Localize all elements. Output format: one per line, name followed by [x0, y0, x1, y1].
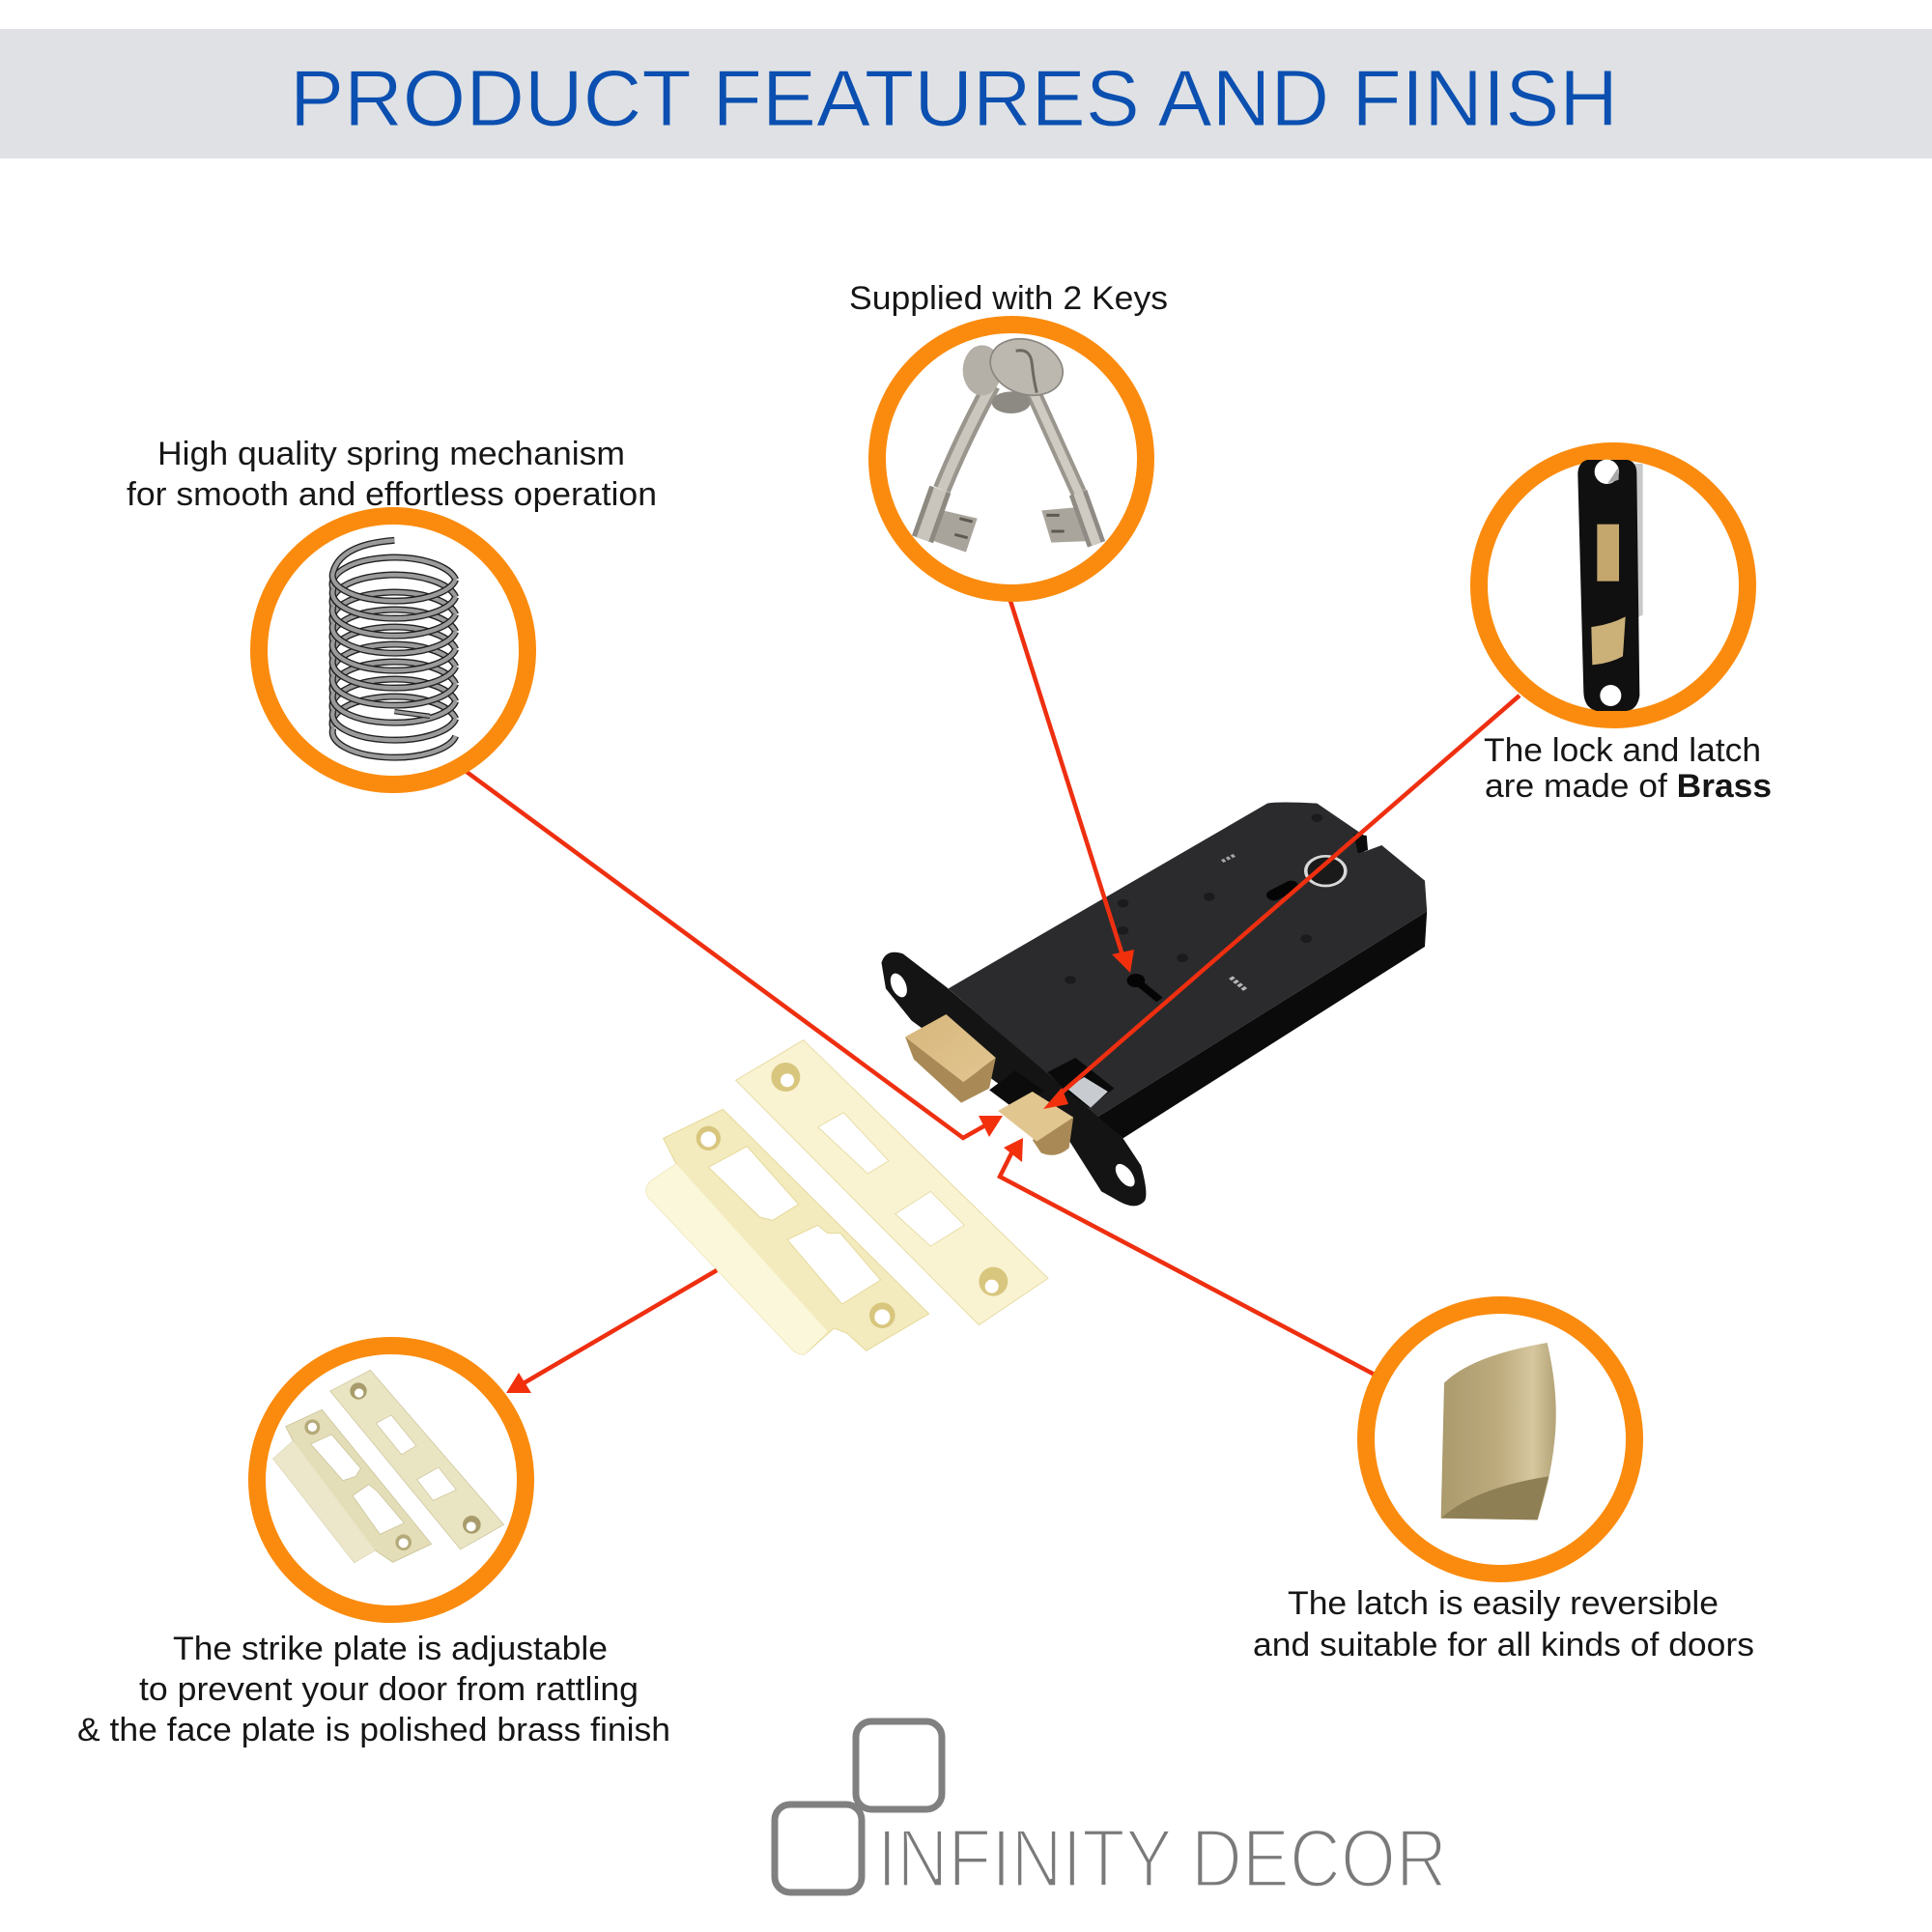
callout ring: keys — [877, 325, 1146, 593]
strike plate and face plate — [646, 1040, 1048, 1354]
label: spring — [127, 436, 657, 513]
icon: coil spring — [332, 540, 456, 757]
label: strike plate: & the face plate is polished brass finish — [77, 1712, 670, 1748]
label: strike plate: The strike plate is adjustable — [173, 1631, 608, 1667]
callout ring: brass lock face — [1479, 451, 1747, 720]
arrow: keys to keyhole — [1010, 601, 1123, 958]
label: brass: The lock and latch — [1484, 732, 1761, 769]
callout ring: reversible latch — [1366, 1305, 1634, 1574]
arrow: spring to latch bolt — [467, 772, 1003, 1138]
label: brass: are made of Brass — [1485, 768, 1772, 805]
label: keys: Supplied with 2 Keys — [849, 280, 1168, 317]
label: brass — [1484, 732, 1772, 805]
arrow: strike plate to inset — [506, 1270, 717, 1393]
logo: Infinity Decor: INFINITY DECOR — [877, 1813, 1447, 1905]
label: strike plate — [77, 1631, 670, 1748]
logo: Infinity Decor — [775, 1721, 1447, 1905]
lock body illustration — [881, 802, 1427, 1206]
label: spring: for smooth and effortless operation — [127, 476, 657, 513]
label: spring: High quality spring mechanism — [157, 436, 625, 472]
arrow: brass lock to latch bolt — [1061, 696, 1520, 1094]
icon: two keys — [923, 330, 1096, 553]
icon: lock face plate — [1577, 460, 1643, 711]
title banner: PRODUCT FEATURES AND FINISH — [290, 53, 1618, 143]
callout ring: spring — [259, 516, 527, 784]
label: latch: The latch is easily reversible — [1288, 1585, 1719, 1622]
callout ring: strike plates — [257, 1346, 526, 1614]
title banner — [0, 29, 1932, 158]
icon: strike and face plates — [273, 1370, 504, 1563]
label: latch: and suitable for all kinds of doors — [1253, 1627, 1754, 1663]
label: latch — [1253, 1585, 1754, 1663]
icon: brass latch — [1441, 1343, 1556, 1520]
label: strike plate: to prevent your door from rattling — [139, 1671, 639, 1708]
arrow heads over lock — [1043, 950, 1134, 1109]
arrow: latch inset to latch bolt — [1000, 1138, 1375, 1375]
